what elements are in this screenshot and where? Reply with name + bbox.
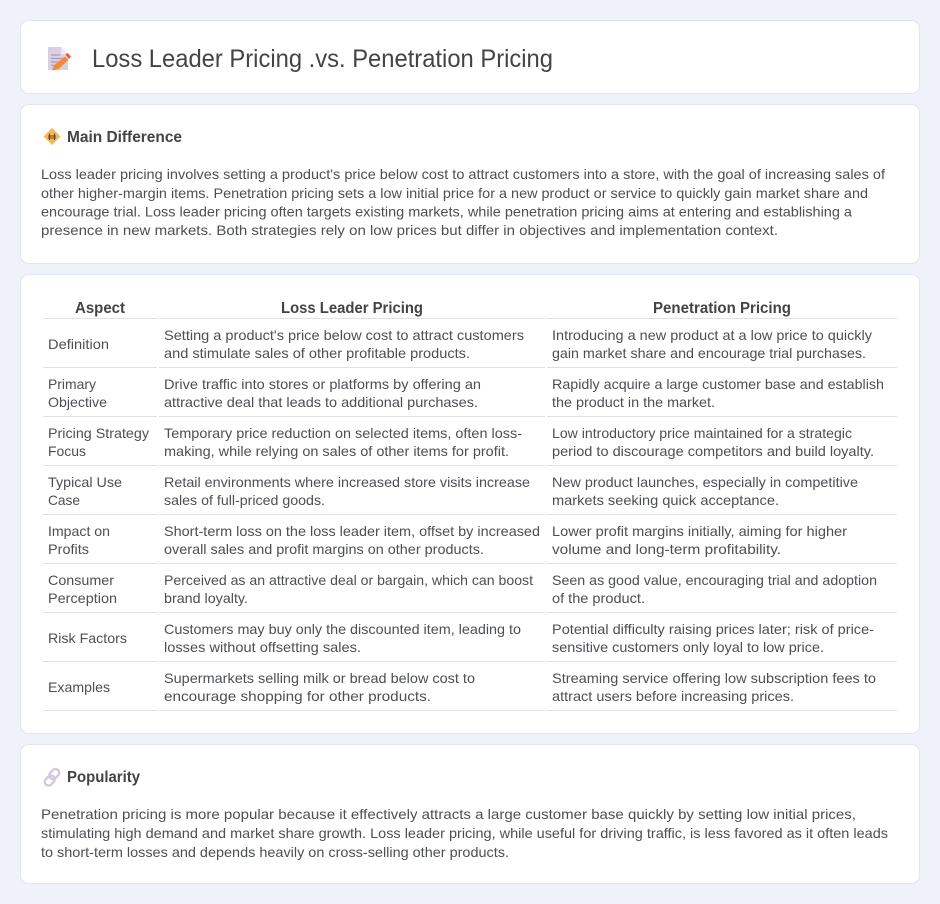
row: consumer perception: of the product.	[552, 590, 645, 606]
icon: warning diamond	[44, 128, 60, 145]
text block: main difference: other higher-margin items. Penetration pricing sets a low initial price for a new product or service to quickly gain market share and	[41, 185, 868, 201]
icon: chain link	[43, 767, 61, 787]
row: examples: Streaming service offering low subscription fees to	[552, 670, 876, 686]
row: risk factors: Potential difficulty raising prices later; risk of price-	[552, 621, 874, 637]
text block: main difference: Loss leader pricing involves setting a product's price below cost to attract customers into a store, with the goal of increasing sales of	[41, 166, 885, 182]
row: risk factors: sensitive customers only loyal to low price.	[552, 639, 824, 655]
row: risk factors: Risk Factors	[48, 630, 127, 646]
row: consumer perception: brand loyalty.	[164, 590, 248, 606]
row: definition: Definition	[48, 336, 109, 352]
row: pricing strategy focus: making, while relying on sales of other items for profit.	[164, 443, 509, 459]
panel: main difference	[20, 104, 920, 264]
row: primary objective: Drive traffic into stores or platforms by offering an	[164, 376, 481, 392]
row: typical use case: New product launches, especially in competitive	[552, 474, 858, 490]
heading: main difference: Main Difference	[67, 129, 182, 146]
row: risk factors	[48, 621, 874, 655]
text block: popularity: stimulating high demand and market share growth. Loss leader pricing, while useful for driving traffic, is less favored as it often leads	[41, 825, 888, 841]
row: pricing strategy focus: Pricing Strategy	[48, 425, 149, 441]
row: consumer perception: Seen as good value, encouraging trial and adoption	[552, 572, 877, 588]
row: examples	[48, 670, 876, 704]
row: typical use case: Case	[48, 492, 80, 508]
text block: popularity	[41, 806, 888, 860]
row: typical use case: Retail environments where increased store visits increase	[164, 474, 530, 490]
row: consumer perception: Perceived as an attractive deal or bargain, which can boost	[164, 572, 533, 588]
row: consumer perception: Consumer	[48, 572, 114, 588]
panel: title	[20, 20, 920, 94]
row: risk factors: losses without offsetting sales.	[164, 639, 361, 655]
row: impact on profits: Profits	[48, 541, 89, 557]
table header: Penetration Pricing	[653, 300, 791, 317]
row: risk factors: Customers may buy only the discounted item, leading to	[164, 621, 521, 637]
row: typical use case: sales of full-priced goods.	[164, 492, 325, 508]
row: definition: Setting a product's price below cost to attract customers	[164, 327, 524, 343]
row: primary objective	[48, 376, 884, 410]
icon: document with pencil	[48, 47, 71, 70]
row: typical use case	[48, 474, 858, 508]
row: impact on profits: Short-term loss on the loss leader item, offset by increased	[164, 523, 540, 539]
row: examples: attract users before increasing prices.	[552, 688, 794, 704]
row: pricing strategy focus: Low introductory price maintained for a strategic	[552, 425, 852, 441]
table header: Loss Leader Pricing	[281, 300, 423, 317]
text block: main difference	[41, 166, 885, 238]
row: examples: Examples	[48, 679, 110, 695]
panel: popularity	[20, 744, 920, 884]
row: impact on profits: Lower profit margins initially, aiming for higher	[552, 523, 847, 539]
text block: main difference: presence in new markets. Both strategies rely on low prices but differ in objectives and implementation context.	[41, 222, 778, 238]
row: pricing strategy focus: Focus	[48, 443, 86, 459]
row: primary objective: attractive deal that leads to additional purchases.	[164, 394, 478, 410]
heading: popularity: Popularity	[67, 769, 140, 786]
row: pricing strategy focus: period to discourage competitors and build loyalty.	[552, 443, 874, 459]
row: impact on profits: overall sales and profit margins on other products.	[164, 541, 484, 557]
row: primary objective: Rapidly acquire a large customer base and establish	[552, 376, 884, 392]
row: consumer perception: Perception	[48, 590, 117, 606]
text block: main difference: encourage trial. Loss leader pricing often targets existing markets, while penetration pricing aims at entering and establishing a	[41, 204, 852, 220]
row: primary objective: Primary	[48, 376, 96, 392]
row: typical use case: markets seeking quick acceptance.	[552, 492, 779, 508]
row: impact on profits	[48, 523, 847, 557]
row: definition: and stimulate sales of other profitable products.	[164, 345, 470, 361]
table header: Aspect	[75, 300, 126, 317]
row: pricing strategy focus	[48, 425, 874, 459]
row: primary objective: Objective	[48, 394, 107, 410]
row: impact on profits: volume and long-term profitability.	[552, 541, 781, 557]
row: primary objective: the product in the market.	[552, 394, 715, 410]
row: definition	[48, 327, 872, 361]
text block: popularity: to short-term losses and depends heavily on cross-selling other products.	[41, 844, 509, 860]
panel: comparison table	[20, 274, 920, 734]
row: typical use case: Typical Use	[48, 474, 122, 490]
row: definition: Introducing a new product at a low price to quickly	[552, 327, 872, 343]
text block: popularity: Penetration pricing is more popular because it effectively attracts a large customer base quickly by setting low initial prices,	[41, 806, 856, 822]
row: definition: gain market share and encourage trial purchases.	[552, 345, 866, 361]
row: pricing strategy focus: Temporary price reduction on selected items, often loss-	[164, 425, 522, 441]
row: examples: encourage shopping for other products.	[164, 688, 431, 704]
row: impact on profits: Impact on	[48, 523, 110, 539]
row: consumer perception	[48, 572, 877, 606]
table header	[75, 300, 791, 317]
title text: Loss Leader Pricing .vs. Penetration Pricing	[92, 45, 553, 73]
row: examples: Supermarkets selling milk or bread below cost to	[164, 670, 475, 686]
